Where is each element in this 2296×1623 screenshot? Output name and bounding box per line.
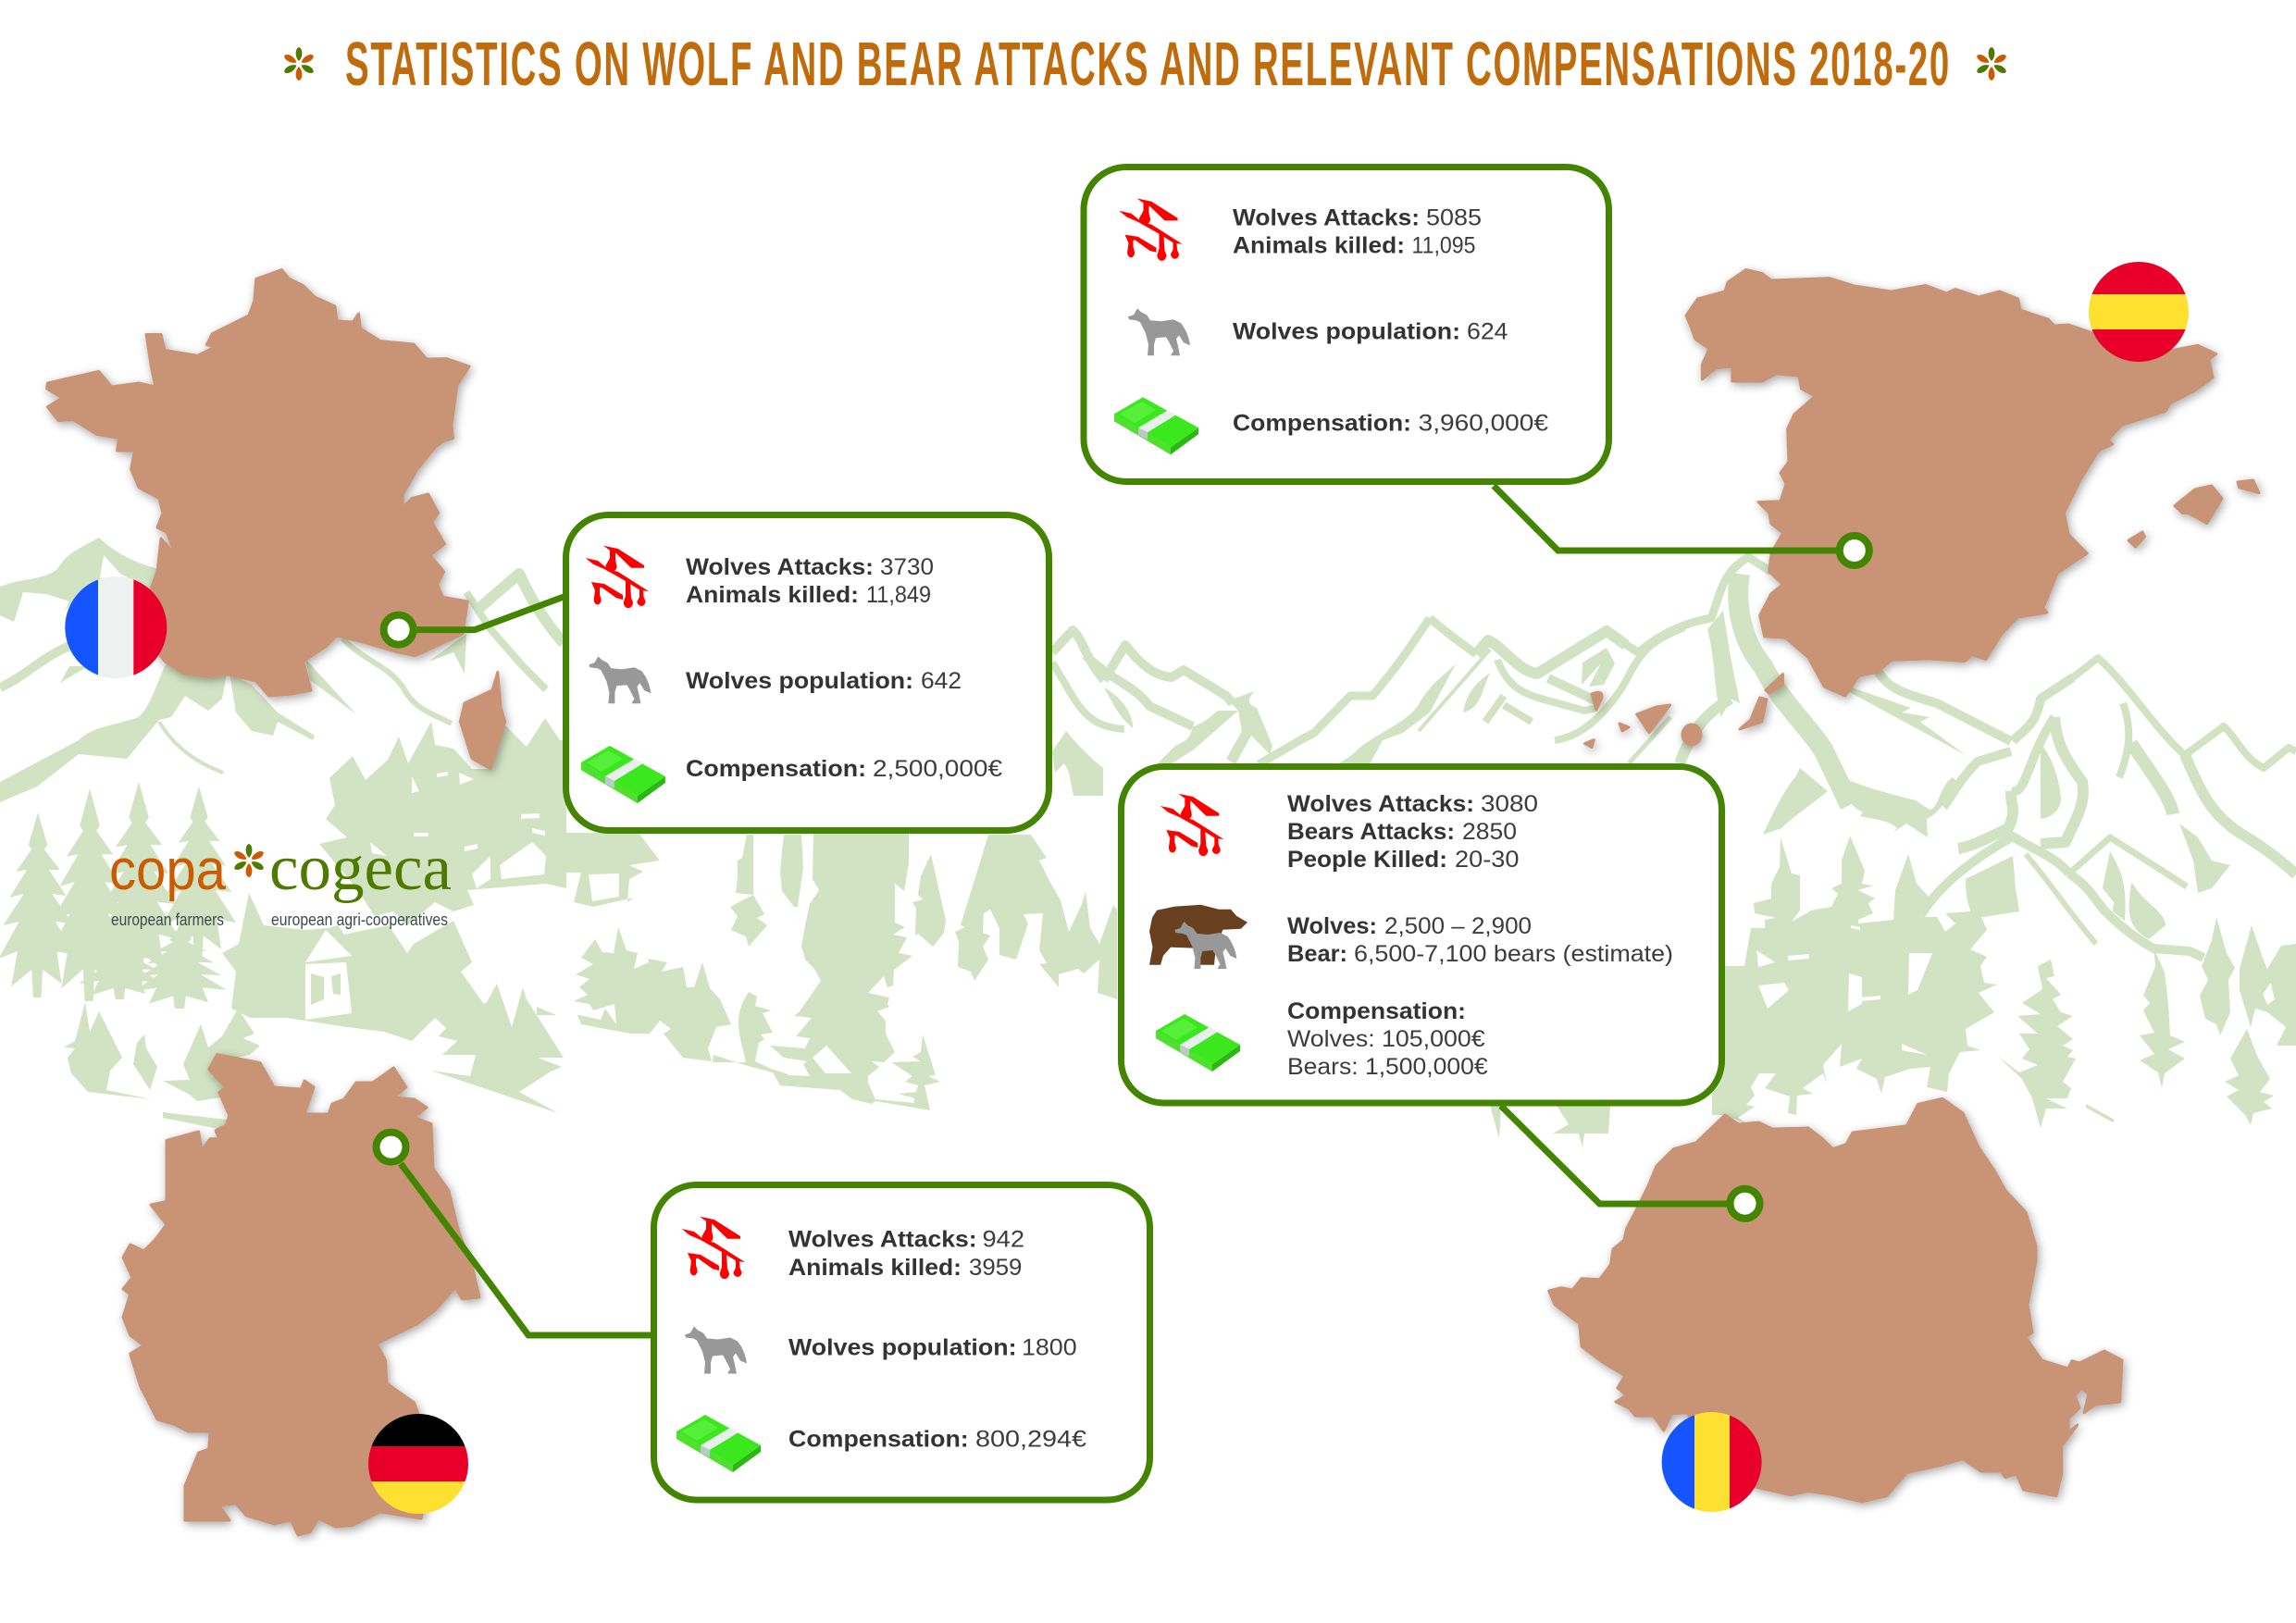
logo: copa cogeca bbox=[109, 833, 452, 929]
attacks text: 20-30 bbox=[1455, 847, 1520, 873]
flag: Romania bbox=[1660, 1410, 1764, 1514]
attacks text: Animals killed: bbox=[788, 1255, 962, 1281]
compensation text bbox=[1233, 411, 1548, 437]
compensation text: 3,960,000€ bbox=[1419, 411, 1548, 437]
icon: wolf bbox=[1128, 308, 1190, 355]
connector: Spain bbox=[1494, 486, 1869, 565]
map: Spain bbox=[1584, 270, 2259, 748]
attacks text: Wolves Attacks: bbox=[1233, 205, 1420, 231]
icon: money bbox=[676, 1415, 761, 1472]
panel: France bbox=[566, 514, 1049, 831]
logo: copa cogeca: european farmers bbox=[111, 911, 224, 929]
compensation text bbox=[788, 1427, 1086, 1453]
title bbox=[283, 30, 2007, 99]
population text: Wolves population: bbox=[1233, 319, 1460, 345]
icon: claw marks bbox=[1160, 794, 1223, 856]
attacks text: Animals killed: bbox=[1233, 233, 1405, 259]
compensation text: Compensation: bbox=[788, 1427, 969, 1453]
attacks text: 3080 bbox=[1481, 791, 1538, 817]
background: mountains and forest bbox=[0, 538, 2296, 1147]
title flower right bbox=[1976, 47, 2007, 81]
population text: 624 bbox=[1467, 319, 1508, 345]
attacks text: Wolves Attacks: bbox=[788, 1227, 977, 1253]
icon: wolf bbox=[589, 656, 651, 703]
flag: France bbox=[65, 574, 170, 681]
attacks text: 5085 bbox=[1426, 205, 1482, 231]
attacks text: Wolves Attacks: bbox=[1287, 791, 1474, 817]
compensation text bbox=[686, 756, 1002, 782]
connector: Romania bbox=[1501, 1106, 1760, 1219]
population text: Wolves: bbox=[1287, 913, 1377, 939]
compensation text: 2,500,000€ bbox=[873, 756, 1002, 782]
population text: Bear: bbox=[1287, 941, 1347, 967]
map: Romania bbox=[1549, 1098, 2122, 1502]
attacks text: Bears Attacks: bbox=[1287, 819, 1455, 845]
compensation text: 800,294€ bbox=[975, 1427, 1086, 1453]
attacks text: 3959 bbox=[969, 1255, 1022, 1281]
compensation text: Compensation: bbox=[1233, 411, 1411, 437]
attacks text: 11,849 bbox=[866, 582, 931, 608]
attacks text: 3730 bbox=[880, 554, 934, 580]
logo: copa cogeca: european agri-cooperatives bbox=[271, 911, 448, 929]
panel: Spain bbox=[1084, 167, 1608, 481]
icon: claw marks bbox=[1119, 198, 1183, 261]
compensation text: Compensation: bbox=[1287, 998, 1466, 1024]
title flower left bbox=[283, 47, 315, 81]
compensation text: Bears: 1,500,000€ bbox=[1287, 1054, 1488, 1080]
icon: claw marks bbox=[682, 1217, 745, 1279]
attacks text: 11,095 bbox=[1412, 233, 1475, 259]
compensation text: Compensation: bbox=[686, 756, 866, 782]
connector: France bbox=[384, 597, 564, 645]
population text: 1800 bbox=[1022, 1335, 1077, 1361]
panel: Germany bbox=[653, 1184, 1149, 1500]
population text: Wolves population: bbox=[788, 1335, 1016, 1361]
flag: Spain bbox=[2087, 259, 2191, 365]
icon: wolf bbox=[685, 1327, 747, 1373]
logo: copa cogeca: cogeca bbox=[269, 833, 452, 904]
population text: Wolves population: bbox=[686, 668, 913, 694]
connector: Germany bbox=[376, 1133, 651, 1335]
population text: 2,500 – 2,900 bbox=[1384, 913, 1532, 939]
icon: bear and wolf bbox=[1149, 905, 1247, 969]
icon: claw marks bbox=[586, 546, 649, 608]
attacks text bbox=[788, 1227, 1024, 1281]
compensation text: Wolves: 105,000€ bbox=[1287, 1026, 1485, 1052]
attacks text: Animals killed: bbox=[686, 582, 859, 608]
attacks text bbox=[1287, 791, 1538, 873]
attacks text: Wolves Attacks: bbox=[686, 554, 874, 580]
attacks text bbox=[686, 554, 934, 608]
map: France bbox=[47, 270, 505, 769]
population text: 642 bbox=[921, 668, 962, 694]
panel: Romania bbox=[1122, 766, 1721, 1103]
compensation text bbox=[1287, 998, 1488, 1080]
population text bbox=[1287, 913, 1673, 967]
population text: 6,500-7,100 bears (estimate) bbox=[1354, 941, 1673, 967]
attacks text: People Killed: bbox=[1287, 847, 1447, 873]
attacks text: 2850 bbox=[1462, 819, 1517, 845]
attacks text bbox=[1233, 205, 1482, 259]
icon: money bbox=[581, 746, 665, 803]
icon: money bbox=[1114, 397, 1198, 454]
attacks text: 942 bbox=[983, 1227, 1024, 1253]
flag: Germany bbox=[366, 1411, 470, 1517]
logo: copa cogeca: copa bbox=[109, 838, 226, 902]
icon: money bbox=[1156, 1014, 1240, 1072]
map: Germany bbox=[123, 1055, 479, 1535]
